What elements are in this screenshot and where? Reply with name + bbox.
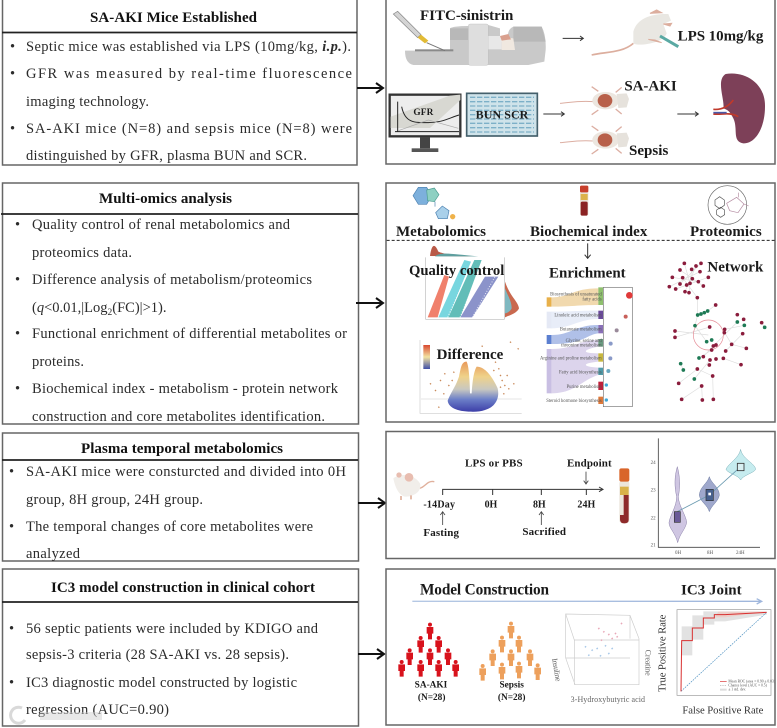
panel: SA-AKI Mice Established xyxy=(2,0,357,165)
chart: violin plot: 8H xyxy=(707,551,713,556)
label: SA-AKI: SA-AKI xyxy=(624,79,677,95)
chart: violin plot: 22 xyxy=(651,516,656,521)
label: Sepsis N=28 xyxy=(498,680,525,703)
chart: enrichment sankey and dots: Linoleic acid metabolism xyxy=(554,313,602,318)
arrow: clinical to model xyxy=(358,649,384,659)
chart: violin plot: 24 xyxy=(651,461,656,466)
text block: multi-omics bullets xyxy=(15,217,347,425)
chart: timeline: LPS or PBS xyxy=(465,458,523,470)
text block: mice model bullets: imaging technology. xyxy=(26,94,149,110)
chart: enrichment sankey and dots: Biosynthesis of unsaturated xyxy=(550,292,602,297)
icon: BUN SCR plate xyxy=(467,93,537,136)
text block: mice model bullets: distinguished by GFR, plasma BUN and SCR. xyxy=(26,148,307,164)
chart: ROC curve: Chance level (AUC = 0.5) xyxy=(728,683,768,687)
text block: multi-omics bullets: (q<0.01,|Log xyxy=(32,300,108,316)
text block: clinical bullets: sepsis-3 criteria (28 SA-AKI vs. 28 sepsis). xyxy=(26,647,289,663)
icon: metabolite molecule xyxy=(413,187,455,219)
label: LPS 10mg/kg: LPS 10mg/kg xyxy=(678,29,764,45)
arrow xyxy=(563,36,583,41)
label: Sepsis N=28: Sepsis xyxy=(499,680,524,690)
panel: model construction xyxy=(386,569,776,725)
chart: violin plot: 24H xyxy=(736,551,745,556)
panel: mouse model illustration xyxy=(386,0,775,164)
label: Enrichment: Enrichment xyxy=(549,265,626,281)
text block: clinical bullets: IC3 diagnostic model constructed by logistic xyxy=(26,675,297,691)
chart: enrichment sankey and dots: threonine metabolism xyxy=(561,343,602,348)
text block: multi-omics bullets: Biochemical index - metabolism - protein network xyxy=(32,381,339,397)
text block: mice model bullets: SA-AKI mice (N=8) and sepsis mice (N=8) were xyxy=(26,121,352,137)
panel: temporal sampling timeline xyxy=(386,432,775,558)
heading: IC3 model construction in clinical cohort: IC3 model construction in clinical cohort xyxy=(51,580,315,596)
chart: timeline: -14Day xyxy=(423,499,455,510)
icon: GFR monitor xyxy=(390,95,460,152)
icon group: sepsis patients xyxy=(479,622,541,681)
panel: Plasma temporal metabolomics xyxy=(2,433,358,562)
chart: 3D scatter: 3-Hydroxybutyric acid xyxy=(571,695,645,704)
chart: ROC curve xyxy=(658,610,776,717)
label: Biochemical index: Biochemical index xyxy=(530,224,648,240)
text block: multi-omics bullets: Difference analysis of metabolism/proteomics xyxy=(32,272,312,288)
arrow: temporal to timeline xyxy=(358,498,385,508)
text block: temporal bullets: • xyxy=(9,464,14,480)
chart: enrichment sankey and dots: Butanoate metabolism xyxy=(560,327,602,332)
chart: enrichment sankey and dots: Fatty acid biosynthesis xyxy=(559,370,602,375)
arrow: model progression xyxy=(412,599,762,604)
text block: mice model bullets: • xyxy=(10,39,15,55)
chart: ROC curve: True Positive Rate xyxy=(658,614,669,692)
label: Sepsis N=28: (N=28) xyxy=(498,692,525,703)
chart: 3D scatter: Insuline xyxy=(550,658,563,683)
heading: Model Construction: Model Construction xyxy=(420,582,549,599)
chart: enrichment sankey and dots: Steroid hormone biosynthesis xyxy=(546,399,602,404)
text block: mice model bullets: • xyxy=(10,121,15,137)
panel: multi-omics results xyxy=(386,183,775,422)
text block: multi-omics bullets: proteins. xyxy=(32,354,84,370)
chart: timeline: 24H xyxy=(577,499,596,510)
icon: sepsis mouse xyxy=(560,126,629,154)
chart: timeline xyxy=(423,458,612,539)
icon: proteomics circle xyxy=(708,186,749,224)
text block: mice model bullets: GFR was measured by real-time fluorescence xyxy=(26,66,352,82)
chart: ROC curve: False Positive Rate xyxy=(682,706,764,717)
icon: imaging machine with syringe xyxy=(393,11,546,65)
icon group: SA-AKI patients xyxy=(398,623,459,677)
text block: multi-omics bullets: 2 xyxy=(108,308,113,318)
icon: BUN SCR plate: BUN SCR xyxy=(476,107,529,121)
text block: mice model bullets: Septic mice was established via LPS (10mg/kg, i.p.). xyxy=(26,39,351,55)
label: Sepsis: Sepsis xyxy=(629,143,668,159)
chart: timeline: Endpoint xyxy=(567,458,612,470)
icon: kidney xyxy=(713,73,765,143)
chart: timeline: Fasting xyxy=(423,527,459,539)
heading: Multi-omics analysis: Multi-omics analysis xyxy=(99,191,232,207)
label: Difference: Difference xyxy=(437,347,504,363)
chart: timeline: 8H xyxy=(533,499,546,510)
icon: GFR monitor: GFR xyxy=(413,108,434,118)
text block: multi-omics bullets: Functional enrichment of differential metabolites or xyxy=(32,326,347,342)
icon: blood tube xyxy=(619,468,629,523)
text block: clinical bullets: • xyxy=(9,675,14,691)
text block: multi-omics bullets: Quality control of renal metabolomics and xyxy=(32,217,291,233)
heading: SA-AKI Mice Established: SA-AKI Mice Established xyxy=(90,10,258,26)
text block: clinical bullets xyxy=(9,621,319,718)
chart: timeline: 0H xyxy=(485,499,498,510)
label: SA-AKI N=28: (N=28) xyxy=(418,692,445,703)
chart: ROC curve: ± 1 std. dev. xyxy=(728,687,746,691)
chart: quality control scatter xyxy=(426,246,519,319)
arrow xyxy=(543,112,564,116)
text block: temporal bullets: group, 8H group, 24H group. xyxy=(26,492,203,508)
text block: multi-omics bullets: • xyxy=(15,272,20,288)
panel: IC3 model construction xyxy=(2,569,358,726)
chart: violin plot: 23 xyxy=(651,489,656,494)
text block: clinical bullets: 56 septic patients were included by KDIGO and xyxy=(26,621,319,637)
chart: ROC curve: Mean ROC (area = 0.90 ± 0.03) xyxy=(728,679,776,683)
text block: temporal bullets xyxy=(9,464,347,562)
chart: enrichment sankey and dots: Glycine, serine and xyxy=(566,339,602,344)
icon: SA-AKI mouse xyxy=(560,87,629,115)
arrow: mice to imaging xyxy=(357,83,383,93)
text block: temporal bullets: SA-AKI mice were consturcted and divided into 0H xyxy=(26,464,347,480)
arrow: omics analysis to results xyxy=(356,298,383,308)
arrow xyxy=(677,112,698,116)
icon: injected mouse xyxy=(592,10,678,55)
text block: multi-omics bullets: • xyxy=(15,381,20,397)
arrow: biochemical index down xyxy=(585,243,591,258)
text block: clinical bullets: • xyxy=(9,621,14,637)
text block: temporal bullets: • xyxy=(9,519,14,535)
text block: mice model bullets: • xyxy=(10,66,15,82)
chart: violin plot: 0H xyxy=(675,551,681,556)
panel: Multi-omics analysis xyxy=(1,183,358,425)
heading: IC3 Joint: IC3 Joint xyxy=(681,583,742,599)
divider xyxy=(387,239,775,242)
chart: volcano plot xyxy=(420,340,522,413)
chart: enrichment sankey and dots: Arginine and proline metabolism xyxy=(540,356,602,361)
chart: enrichment sankey and dots xyxy=(540,287,633,407)
label: Metabolomics: Metabolomics xyxy=(396,224,486,240)
label: Network: Network xyxy=(707,260,764,276)
chart: enrichment sankey and dots: fatty acids xyxy=(582,298,602,303)
chart: timeline: Sacrified xyxy=(522,526,566,538)
text block: mice model bullets xyxy=(10,39,352,164)
text block: multi-omics bullets: construction and core metabolites identification. xyxy=(32,409,325,425)
icon: mouse xyxy=(393,472,434,500)
text block: multi-omics bullets: proteomics data. xyxy=(32,245,132,261)
icon: blood tube xyxy=(580,186,588,216)
label: Quality control: Quality control xyxy=(409,263,504,279)
text block: multi-omics bullets: • xyxy=(15,326,20,342)
text block: clinical bullets: regression (AUC=0.90) xyxy=(26,702,169,718)
chart: violin plot xyxy=(651,438,760,556)
label: SA-AKI N=28 xyxy=(415,680,448,703)
chart: 3D scatter xyxy=(550,614,653,704)
text block: temporal bullets: analyzed xyxy=(26,546,81,562)
text block: multi-omics bullets: • xyxy=(15,217,20,233)
text block: temporal bullets: The temporal changes of core metabolites were xyxy=(26,519,313,535)
chart: violin plot: 21 xyxy=(651,544,656,549)
label: Proteomics: Proteomics xyxy=(690,224,762,240)
chart: 3D scatter: Creatine xyxy=(644,650,653,676)
label: SA-AKI N=28: SA-AKI xyxy=(415,680,448,690)
text block: multi-omics bullets: (FC)|>1). xyxy=(112,300,166,316)
chart: enrichment sankey and dots: Purine metabolism xyxy=(567,385,602,390)
watermark xyxy=(11,707,102,723)
chart: protein-metabolite network xyxy=(667,261,766,402)
heading: FITC-sinistrin: FITC-sinistrin xyxy=(420,8,514,24)
heading: Plasma temporal metabolomics: Plasma temporal metabolomics xyxy=(81,441,283,457)
